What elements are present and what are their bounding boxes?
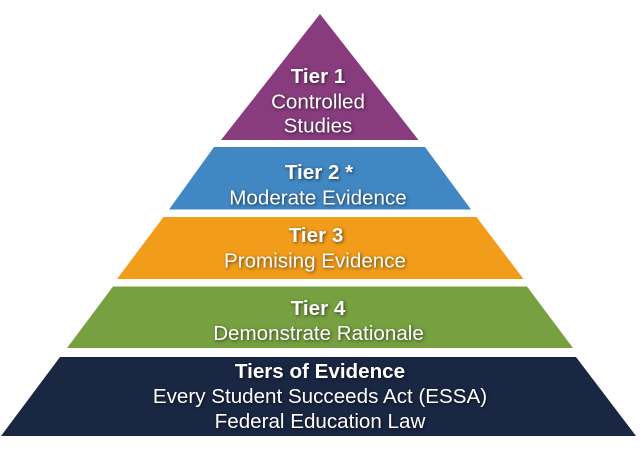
- base heading: Tiers of Evidence: [235, 360, 405, 383]
- tier 1 heading: Tier 1: [291, 65, 345, 88]
- tier 4 description: Demonstrate Rationale: [213, 322, 424, 345]
- tier 2 panel: moderate evidence: [169, 147, 471, 210]
- tier 1 description: Controlled: [271, 90, 365, 114]
- tier 4 heading: Tier 4: [291, 297, 346, 320]
- tier 2 description: Moderate Evidence: [229, 186, 407, 210]
- tier 4 panel: demonstrate rationale: [67, 286, 573, 348]
- tier 1 panel: controlled studies: [221, 14, 418, 140]
- tier 3 description: Promising Evidence: [224, 250, 406, 272]
- base description: law: Federal Education Law: [215, 410, 425, 433]
- base panel: tiers of evidence: [1, 357, 636, 436]
- tier 1 description second line: Studies: [284, 114, 352, 138]
- tier 2 heading: Tier 2 *: [285, 161, 353, 184]
- tier 3 panel: promising evidence: [117, 217, 524, 279]
- tier 3 heading: Tier 3: [289, 224, 343, 247]
- base description: act: Every Student Succeeds Act (ESSA): [153, 385, 487, 408]
